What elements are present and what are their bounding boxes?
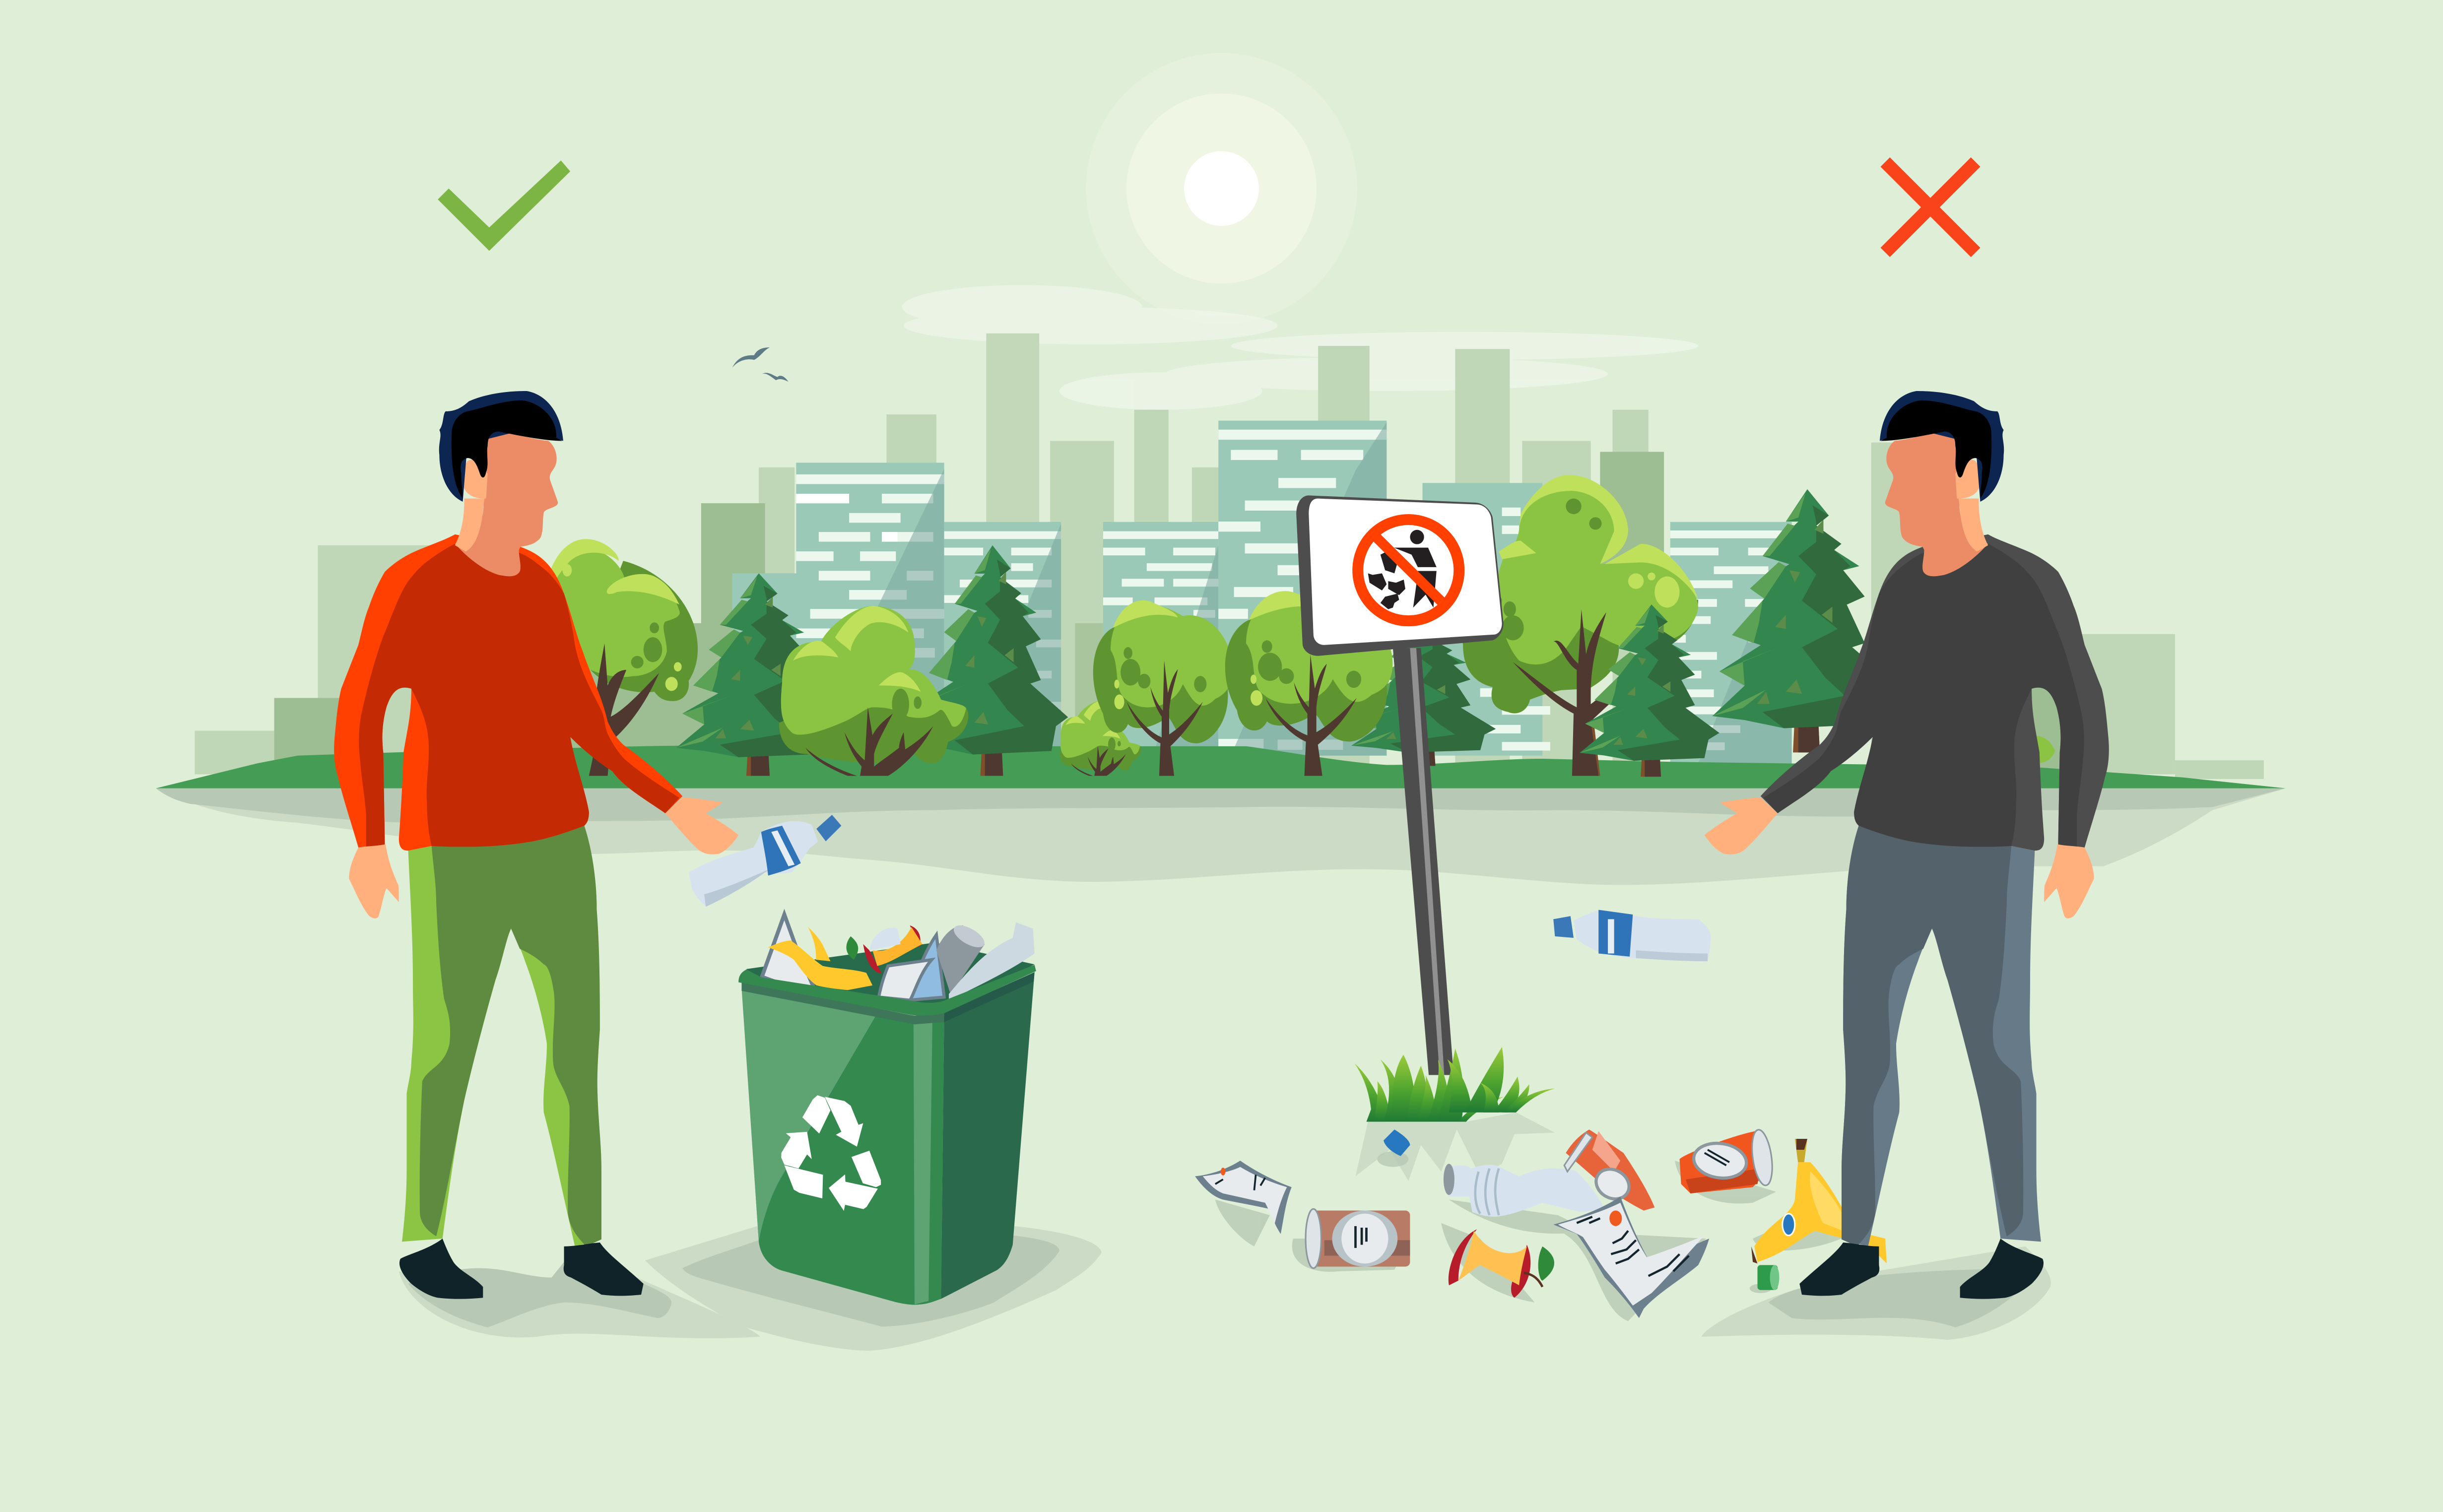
shadow: right man	[1702, 1247, 2051, 1340]
tree: second	[1093, 600, 1233, 776]
left shoe	[1960, 1239, 2044, 1299]
building C	[1103, 522, 1218, 756]
distant skyline	[195, 333, 2264, 779]
bin highlights	[741, 988, 932, 1305]
trouser shading	[420, 826, 601, 1247]
litter shadows	[1215, 1151, 1854, 1321]
right man: littering	[1705, 391, 2109, 1299]
tree: third	[1225, 591, 1392, 776]
no-littering signpost	[1296, 495, 1504, 1075]
can in bin	[936, 925, 985, 994]
clouds	[902, 285, 1698, 410]
neck and ear	[1955, 460, 1988, 551]
bottle lying on right	[1553, 910, 1711, 961]
building D	[1218, 421, 1387, 756]
hair dark	[452, 400, 562, 499]
bush: large	[779, 606, 968, 776]
shadow: recycling bin	[645, 1226, 1102, 1351]
building B	[944, 522, 1061, 756]
right shoe	[564, 1243, 644, 1296]
flying bottle	[689, 815, 841, 907]
brown can	[1306, 1209, 1410, 1268]
blue bottle cap	[1384, 1129, 1410, 1156]
grass tuft	[1355, 1047, 1555, 1122]
grass hill	[156, 746, 2286, 789]
small bush behind right man	[2029, 736, 2055, 763]
cross mark	[1881, 157, 1980, 257]
tree: behind left man	[545, 539, 698, 776]
banana peel	[1751, 1139, 1887, 1263]
apple core	[1449, 1229, 1554, 1298]
rim shadow	[741, 982, 944, 1024]
sign board	[1296, 495, 1504, 656]
face	[1885, 432, 1988, 576]
trouser shading	[1842, 826, 2023, 1247]
bin inside	[746, 942, 1035, 1013]
hair	[1880, 391, 2004, 502]
pine: first	[676, 573, 837, 776]
pine: behind no-littering sign	[1351, 620, 1496, 766]
green bottle cap	[1758, 1265, 1779, 1290]
paper in bin	[762, 915, 818, 997]
no-littering symbol	[1358, 520, 1459, 621]
bin right face	[941, 972, 1035, 1299]
red can middle	[1564, 1129, 1654, 1210]
reaching hand	[665, 797, 738, 855]
pine: second	[913, 545, 1068, 776]
reaching hand	[1705, 797, 1778, 855]
sweater	[1761, 534, 2109, 851]
paper small	[1195, 1161, 1292, 1234]
blue paper in bin	[908, 935, 944, 1000]
sun	[1086, 53, 1357, 324]
sweater shading	[359, 544, 679, 848]
trousers	[402, 826, 601, 1247]
neck and ear	[455, 460, 488, 551]
bottle in bin	[949, 922, 1035, 1000]
hanging hand	[2044, 845, 2094, 919]
bush: small	[1059, 701, 1141, 776]
recycling bin	[738, 915, 1036, 1305]
ground shadow band	[156, 789, 2286, 885]
sign face	[1309, 499, 1502, 645]
building A	[732, 462, 944, 759]
bin rim	[738, 965, 1036, 1016]
building E	[1423, 483, 1550, 756]
bin contents	[762, 915, 1035, 1000]
hair	[439, 391, 563, 502]
hair dark	[1881, 400, 1991, 499]
sweater	[334, 534, 682, 851]
bin left face	[741, 984, 944, 1305]
shadow: left man	[399, 1262, 760, 1338]
banana in bin	[768, 927, 872, 990]
white paper in bin	[879, 960, 932, 1000]
building F	[1670, 522, 1792, 763]
tree: large right	[1462, 475, 1698, 776]
left shoe	[399, 1239, 483, 1299]
orange can right	[1680, 1128, 1775, 1193]
birds	[732, 347, 789, 382]
right shoe	[1799, 1243, 1879, 1296]
pine: far right	[1713, 489, 1897, 752]
trousers	[1842, 826, 2041, 1247]
grass reflection shadow	[1356, 1113, 1555, 1181]
pole	[1393, 648, 1453, 1075]
paper large	[1553, 1196, 1709, 1318]
lying bottle	[1444, 1164, 1605, 1217]
pine: right front of large tree	[1580, 604, 1719, 777]
apple core in bin	[847, 925, 923, 974]
teal city buildings	[732, 421, 1792, 763]
face	[455, 432, 558, 576]
sweater shading	[1764, 544, 2084, 848]
recycling symbol	[781, 1095, 881, 1211]
left man: recycling	[334, 391, 738, 1299]
litter	[1195, 1128, 1887, 1318]
check mark	[438, 160, 570, 251]
hanging hand	[349, 845, 399, 919]
